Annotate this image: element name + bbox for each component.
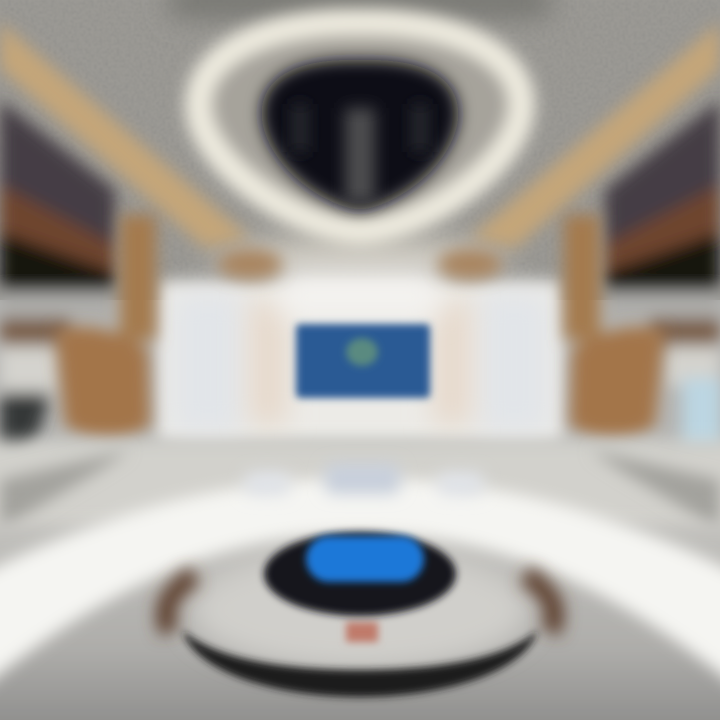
floor centre glow [190, 548, 530, 672]
ceiling beam: right [470, 22, 720, 248]
light ring [198, 22, 522, 232]
back wall [158, 270, 562, 442]
ceiling [0, 0, 720, 300]
dark console with blue screen [264, 532, 456, 616]
red floor marker [346, 622, 378, 642]
floor mid band [0, 440, 720, 560]
blue screen [296, 324, 430, 398]
floor ring [166, 575, 554, 697]
right side gallery [605, 100, 720, 495]
wood pillars and bases: right [438, 215, 665, 438]
lower floor [0, 525, 720, 720]
ceiling beam: left [0, 22, 250, 248]
white curved desk [0, 464, 720, 690]
dark ceiling centre [262, 60, 458, 210]
wood pillars and bases: left [55, 215, 282, 438]
left side gallery [0, 100, 115, 490]
